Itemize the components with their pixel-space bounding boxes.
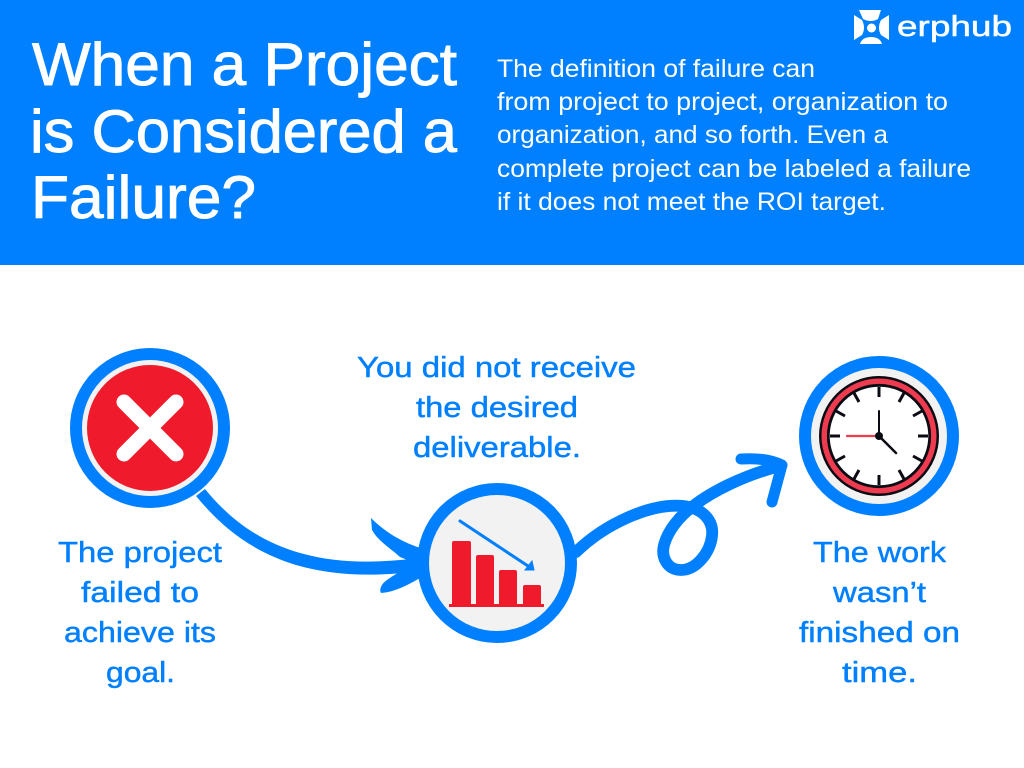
logo wordmark: erphub xyxy=(897,11,1012,43)
icon: failure red cross xyxy=(76,354,224,502)
label: failed to achieve goal: achieve its xyxy=(64,617,216,649)
intro text block xyxy=(497,55,971,216)
label: work not finished on time: The work xyxy=(813,537,947,569)
intro text block: complete project can be labeled a failure xyxy=(497,155,971,183)
icon: logo mark xyxy=(854,10,889,44)
intro text block: from project to project, organization to xyxy=(497,88,948,116)
label: desired deliverable: the desired xyxy=(416,392,578,424)
label: failed to achieve goal xyxy=(58,537,222,689)
label: failed to achieve goal: goal. xyxy=(106,657,175,689)
icon: declining bar chart xyxy=(423,489,571,637)
title: Failure? xyxy=(31,164,256,231)
label: work not finished on time: time. xyxy=(842,657,917,689)
label: failed to achieve goal: The project xyxy=(58,537,222,569)
intro text block: The definition of failure can xyxy=(497,55,815,83)
label: failed to achieve goal: failed to xyxy=(81,577,199,609)
logo: erphub xyxy=(854,10,1012,44)
arrow: failure icon to chart icon xyxy=(196,489,420,593)
title: is Considered a xyxy=(30,98,458,165)
header band xyxy=(0,0,1024,265)
title xyxy=(30,31,458,231)
bars xyxy=(449,541,544,607)
label: desired deliverable: deliverable. xyxy=(413,432,581,464)
intro text block: organization, and so forth. Even a xyxy=(497,121,888,149)
label: desired deliverable: You did not receive xyxy=(357,352,636,384)
arrow: chart icon to clock icon with loop xyxy=(576,459,782,570)
clock hands xyxy=(847,411,896,453)
downward trend arrow xyxy=(460,521,534,570)
label: work not finished on time xyxy=(799,537,960,689)
title: When a Project xyxy=(32,31,457,98)
label: desired deliverable xyxy=(357,352,636,464)
icon: clock xyxy=(805,362,953,510)
intro text block: if it does not meet the ROI target. xyxy=(497,188,886,216)
clock ticks xyxy=(830,387,928,485)
label: work not finished on time: wasn’t xyxy=(832,577,926,609)
label: work not finished on time: finished on xyxy=(799,617,960,649)
